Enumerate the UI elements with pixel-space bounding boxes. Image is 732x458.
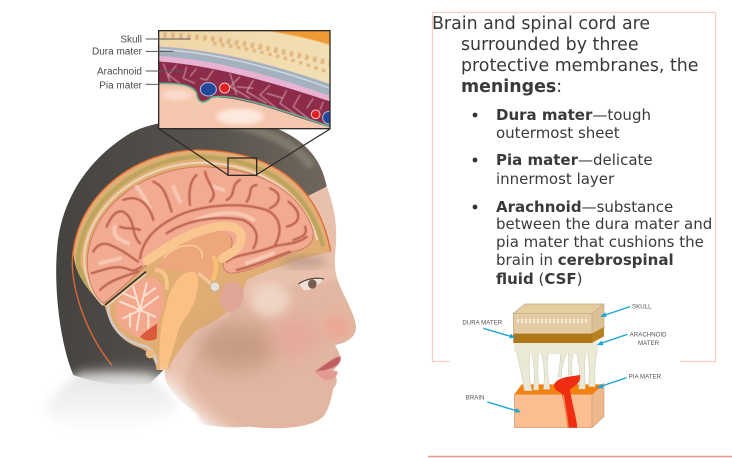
bottom rule (428, 456, 732, 458)
blood vessel (554, 375, 580, 428)
arrow: skull (600, 307, 630, 317)
neck fade (27, 377, 240, 458)
skull band (78, 157, 323, 303)
vessel: vein right (322, 110, 330, 124)
bullet: dura mater: outermost sheet (496, 124, 620, 142)
arachnoid sheet (514, 342, 598, 354)
head section fill (73, 150, 331, 370)
tentorium (105, 272, 146, 305)
bullet: arachnoid: brain in cerebrospinal (496, 251, 674, 269)
cerebrum (87, 167, 313, 303)
cerebellum membrane (108, 307, 157, 363)
vessel: vein (200, 83, 216, 96)
vessel: artery (220, 83, 230, 93)
diagram labels: PIA MATER (629, 374, 662, 381)
ear (216, 279, 247, 315)
diagram labels: BRAIN (466, 394, 484, 401)
arrow: arachnoid (597, 334, 627, 345)
brain tissue (159, 46, 330, 128)
bullet: arachnoid (473, 198, 712, 288)
mammillary body (213, 258, 216, 278)
arrow: pia (597, 378, 627, 388)
labels: layers: Arachnoid (97, 66, 142, 78)
skull block (513, 304, 604, 334)
heading text: meninges: (461, 77, 562, 97)
labels: layers: Dura mater (92, 46, 143, 58)
bullet: arachnoid: fluid (CSF) (496, 270, 583, 288)
hair highlight (227, 123, 312, 167)
heading text (432, 14, 698, 97)
midbrain edge (155, 270, 167, 290)
subarachnoid space (159, 61, 330, 127)
labels: layers (92, 34, 143, 92)
shoulder shading (45, 373, 180, 432)
diagram labels: SKULL (632, 303, 652, 310)
heading text: protective membranes, the (461, 56, 698, 76)
heading text: surrounded by three (461, 35, 639, 55)
dura block (513, 327, 604, 343)
vertebra (146, 350, 154, 358)
inset: meninges close-up (146, 31, 335, 129)
labels: layers: Pia mater (99, 80, 143, 92)
sulcus (191, 102, 198, 122)
thalamus (155, 232, 231, 280)
diagram labels: MATER (638, 340, 660, 347)
face (165, 187, 356, 428)
arachnoid membrane (159, 56, 330, 101)
fornix (163, 245, 202, 258)
heading text: Brain and spinal cord are (432, 14, 650, 34)
jaw blend (186, 253, 356, 428)
brainstem (159, 272, 198, 370)
zoom selector (228, 158, 257, 175)
face shading (197, 323, 277, 370)
labels: layers: Skull (120, 34, 142, 46)
bullet: dura mater: Dura mater—tough (496, 106, 651, 124)
diagram labels (462, 303, 667, 401)
hair (56, 118, 327, 385)
leader lines (146, 39, 191, 84)
cerebellum red (140, 323, 157, 341)
gyrus highlight (217, 109, 263, 125)
bullet: arachnoid: pia mater that cushions the (496, 233, 704, 251)
sulci (92, 172, 307, 290)
hypophysis stalk (198, 273, 215, 287)
diagram: meninges layers (462, 303, 667, 428)
bullet: pia mater: Pia mater—delicate (496, 151, 653, 169)
pia mater line (159, 83, 330, 127)
skull pores (163, 35, 330, 72)
dura line (84, 163, 317, 305)
skull marrow corner (267, 31, 330, 45)
brain block (514, 383, 604, 428)
diagram labels: DURA MATER (462, 319, 503, 326)
inset frame (159, 31, 330, 129)
lips (315, 357, 341, 380)
diagram labels: ARACHNOID (630, 331, 667, 338)
illustration: head cross-section with brain (50, 124, 356, 428)
panel: text frame (432, 12, 716, 362)
bullet: arachnoid: Arachnoid—substance (496, 198, 673, 216)
web strands (163, 63, 323, 120)
arrow: dura (483, 328, 515, 338)
bullet: dura mater (473, 106, 651, 142)
zoom lines (159, 129, 330, 175)
vessel: artery right (311, 110, 320, 119)
dura (159, 47, 330, 96)
cerebellum (115, 278, 165, 339)
arrows (483, 307, 630, 413)
arrow: brain (487, 402, 521, 413)
bullet: arachnoid: between the dura mater and (496, 215, 712, 233)
arachnoid trabeculae (516, 350, 597, 391)
bullet: pia mater (473, 151, 653, 188)
scalp outline (72, 150, 331, 365)
cerebellum arbor (120, 283, 158, 330)
pituitary (210, 282, 220, 291)
skull pores (517, 315, 587, 327)
bullet: pia mater: innermost layer (496, 170, 615, 188)
skull (159, 31, 330, 85)
pia layer (514, 384, 604, 394)
gyri highlights (100, 187, 273, 263)
corpus callosum (147, 226, 241, 261)
eye (298, 278, 324, 290)
